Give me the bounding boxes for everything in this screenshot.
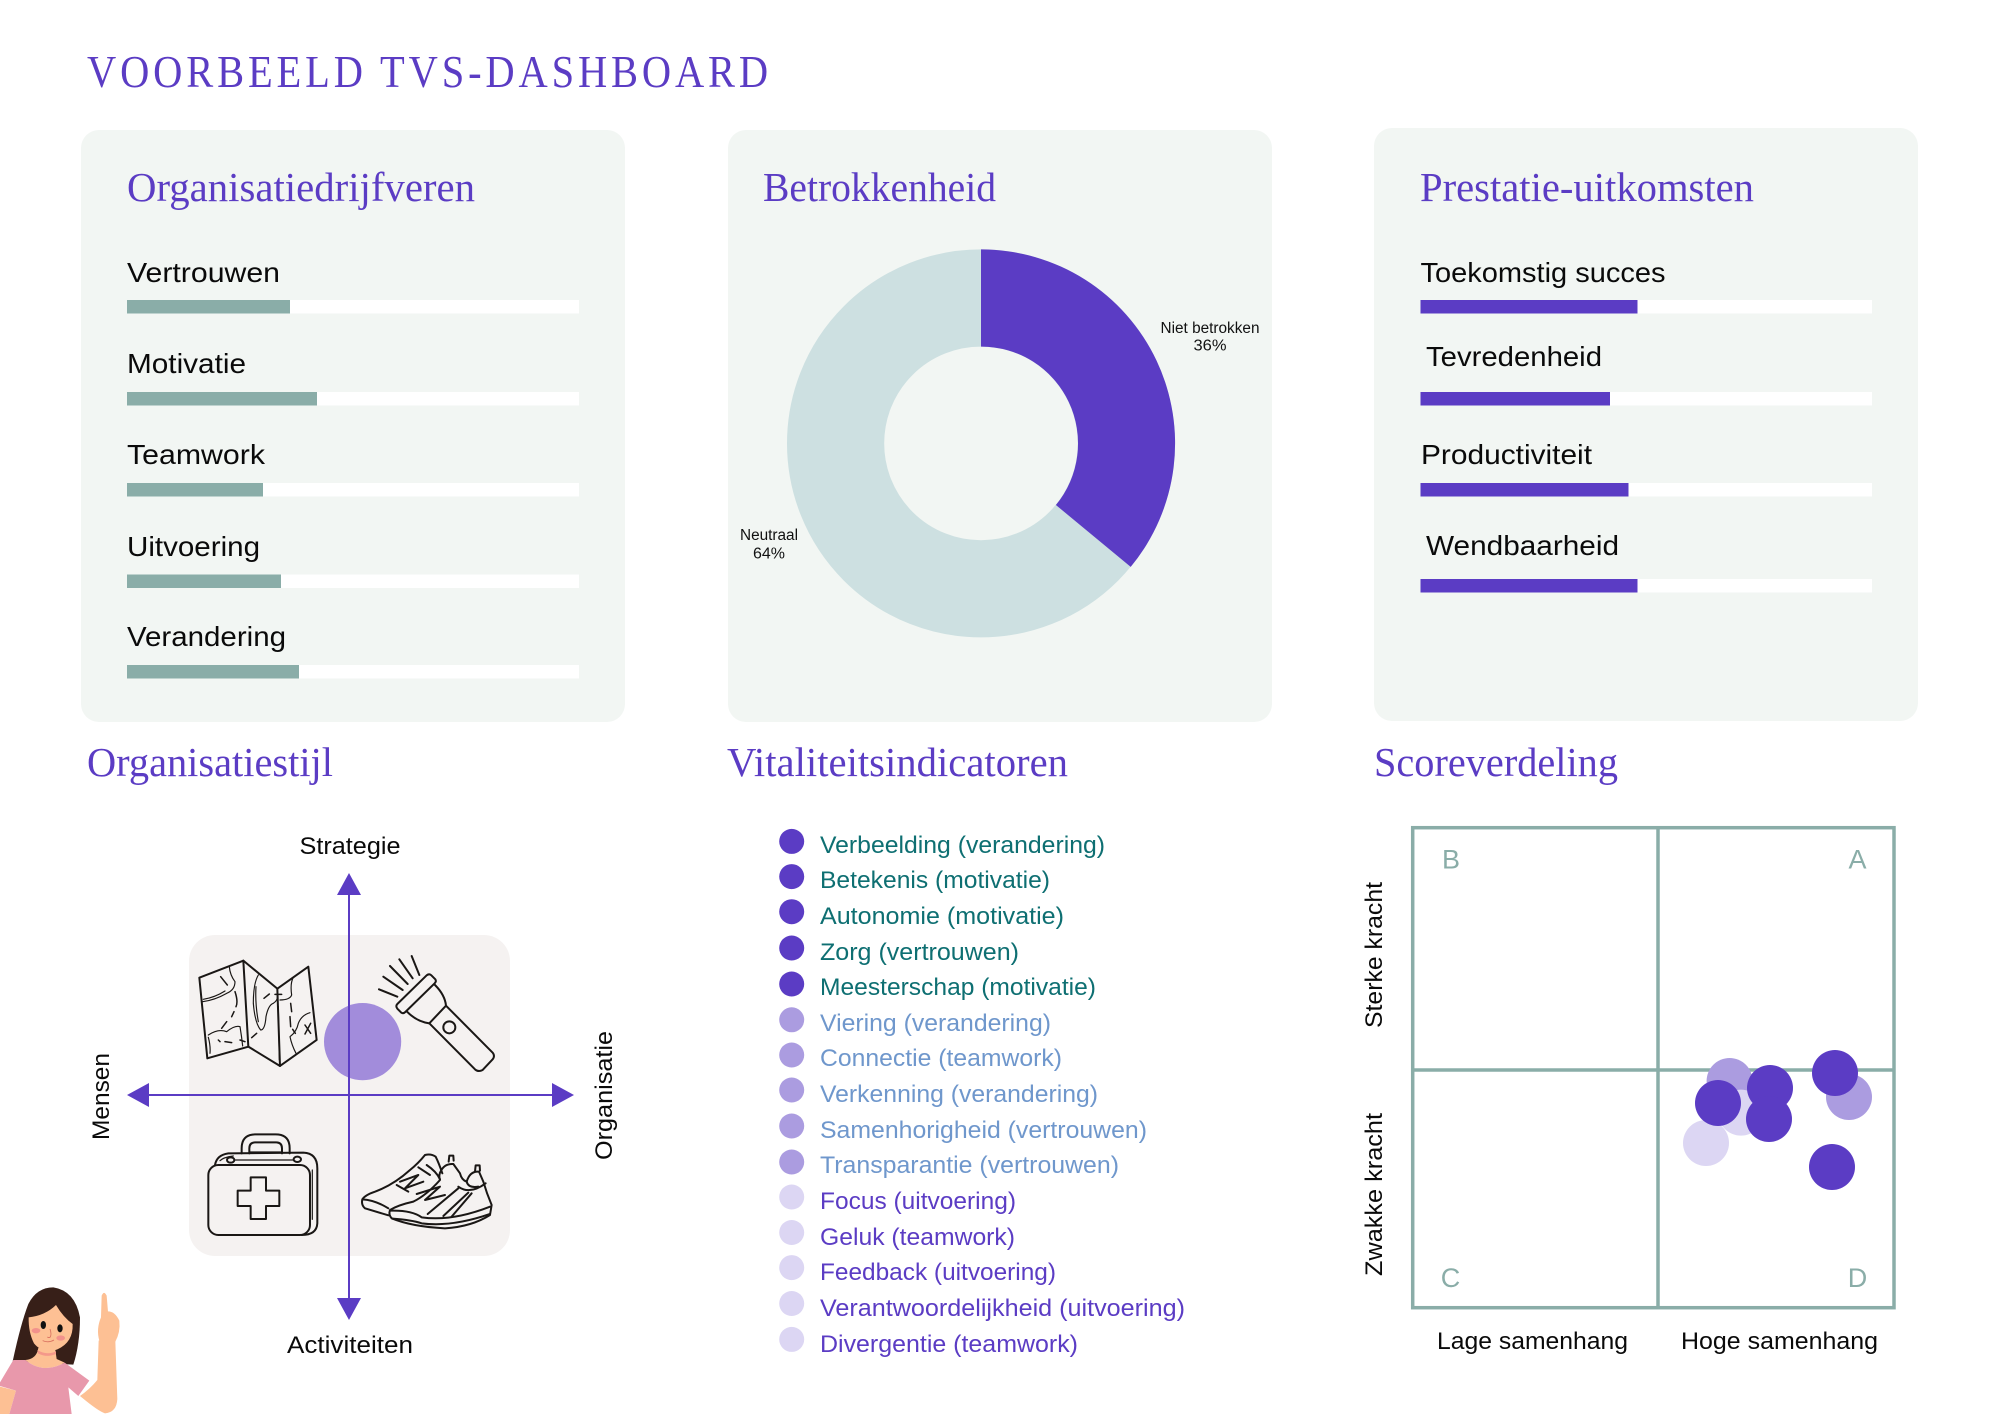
- bar: teamwork: Teamwork: [127, 439, 266, 470]
- legend labels: Viering (verandering): [820, 1010, 1051, 1037]
- bar: wendbaarheid: [1420, 530, 1872, 592]
- chart label: niet betrokken: Niet betrokken: [1160, 320, 1260, 337]
- bar: tevredenheid: [1420, 341, 1872, 406]
- legend labels: [820, 832, 1185, 1358]
- legend labels: Verkenning (verandering): [820, 1081, 1098, 1108]
- heading: organisatiestijl: Organisatiestijl: [87, 739, 333, 785]
- illustration: pointing woman: [0, 1287, 120, 1414]
- legend labels: Connectie (teamwork): [820, 1045, 1062, 1072]
- bar: vertrouwen: [127, 257, 579, 314]
- heading: vitaliteitsindicatoren: Vitaliteitsindicatoren: [727, 739, 1068, 785]
- axis label: hoge samenhang: Hoge samenhang: [1681, 1328, 1878, 1355]
- bar: vertrouwen: Vertrouwen: [127, 257, 280, 288]
- bar: verandering: Verandering: [127, 621, 286, 652]
- bar: teamwork: [127, 439, 579, 496]
- quadrant letter: A: A: [1848, 844, 1867, 874]
- axis label: sterke kracht: Sterke kracht: [1361, 882, 1388, 1028]
- icon: flashlight: [379, 956, 494, 1071]
- heading: prestatie-uitkomsten: Prestatie-uitkomsten: [1420, 164, 1754, 210]
- legend labels: Feedback (uitvoering): [820, 1259, 1056, 1286]
- legend labels: Betekenis (motivatie): [820, 867, 1050, 894]
- heading: organisatiedrijfveren: Organisatiedrijfveren: [127, 164, 475, 210]
- chart label: niet betrokken: [1160, 320, 1260, 354]
- chart label: neutraal: 64%: [753, 546, 785, 562]
- score dots: [1683, 1050, 1872, 1190]
- bar: toekomstig succes: Toekomstig succes: [1420, 257, 1666, 288]
- legend labels: Verantwoordelijkheid (uitvoering): [820, 1295, 1185, 1322]
- heading: scoreverdeling: Scoreverdeling: [1374, 739, 1618, 785]
- legend labels: Geluk (teamwork): [820, 1224, 1015, 1251]
- bar: uitvoering: Uitvoering: [127, 531, 260, 562]
- bar: motivatie: [127, 348, 579, 406]
- chart label: neutraal: Neutraal: [740, 527, 798, 544]
- donut chart: [836, 249, 1175, 589]
- score matrix grid: [1412, 827, 1894, 1308]
- axis label: zwakke kracht: Zwakke kracht: [1361, 1113, 1388, 1276]
- legend labels: Divergentie (teamwork): [820, 1331, 1078, 1358]
- chart label: neutraal: [740, 527, 798, 562]
- legend labels: Autonomie (motivatie): [820, 903, 1064, 930]
- legend labels: Zorg (vertrouwen): [820, 939, 1019, 966]
- legend group: zwakke indicatoren: [779, 1184, 804, 1352]
- axis label: strategie: Strategie: [300, 833, 400, 860]
- legend: vitaliteitsindicatoren: [779, 829, 1185, 1358]
- bar: verandering: [127, 621, 579, 678]
- axis label: activiteiten: Activiteiten: [287, 1332, 413, 1359]
- legend group: sterke indicatoren: [779, 829, 804, 996]
- legend group: gemiddelde indicatoren: [779, 1007, 804, 1174]
- panel: betrokkenheid: [728, 130, 1272, 722]
- legend labels: Verbeelding (verandering): [820, 832, 1105, 859]
- icon: map: [199, 961, 317, 1066]
- axis label: lage samenhang: Lage samenhang: [1437, 1328, 1628, 1355]
- quadrant letter: C: C: [1441, 1263, 1460, 1293]
- bar: tevredenheid: Tevredenheid: [1426, 341, 1602, 372]
- bar: productiviteit: [1420, 439, 1872, 496]
- axis cross arrows: [127, 873, 574, 1320]
- panel: prestatie-uitkomsten: [1374, 128, 1918, 721]
- icon: first aid kit: [208, 1134, 317, 1235]
- icon: running shoes: [362, 1154, 492, 1228]
- dominant style marker circle: [324, 1003, 401, 1080]
- legend labels: Focus (uitvoering): [820, 1188, 1016, 1215]
- bar: uitvoering: [127, 531, 579, 588]
- quadrant letter: B: B: [1442, 844, 1460, 874]
- bar: motivatie: Motivatie: [127, 348, 246, 379]
- legend labels: Transparantie (vertrouwen): [820, 1152, 1119, 1179]
- heading: betrokkenheid: Betrokkenheid: [763, 164, 996, 210]
- bar: wendbaarheid: Wendbaarheid: [1426, 530, 1619, 561]
- axis label: organisatie: Organisatie: [591, 1031, 618, 1160]
- legend labels: Meesterschap (motivatie): [820, 974, 1096, 1001]
- title: VOORBEELD TVS-DASHBOARD: [87, 47, 768, 98]
- axis label: mensen: Mensen: [88, 1053, 115, 1140]
- panel: organisatiedrijfveren: [81, 130, 625, 722]
- chart label: niet betrokken: 36%: [1194, 338, 1227, 354]
- quadrant letter: D: D: [1848, 1263, 1867, 1293]
- quadrant background: [189, 935, 510, 1256]
- bar: toekomstig succes: [1420, 257, 1872, 314]
- bar: productiviteit: Productiviteit: [1421, 439, 1592, 470]
- legend labels: Samenhorigheid (vertrouwen): [820, 1117, 1147, 1144]
